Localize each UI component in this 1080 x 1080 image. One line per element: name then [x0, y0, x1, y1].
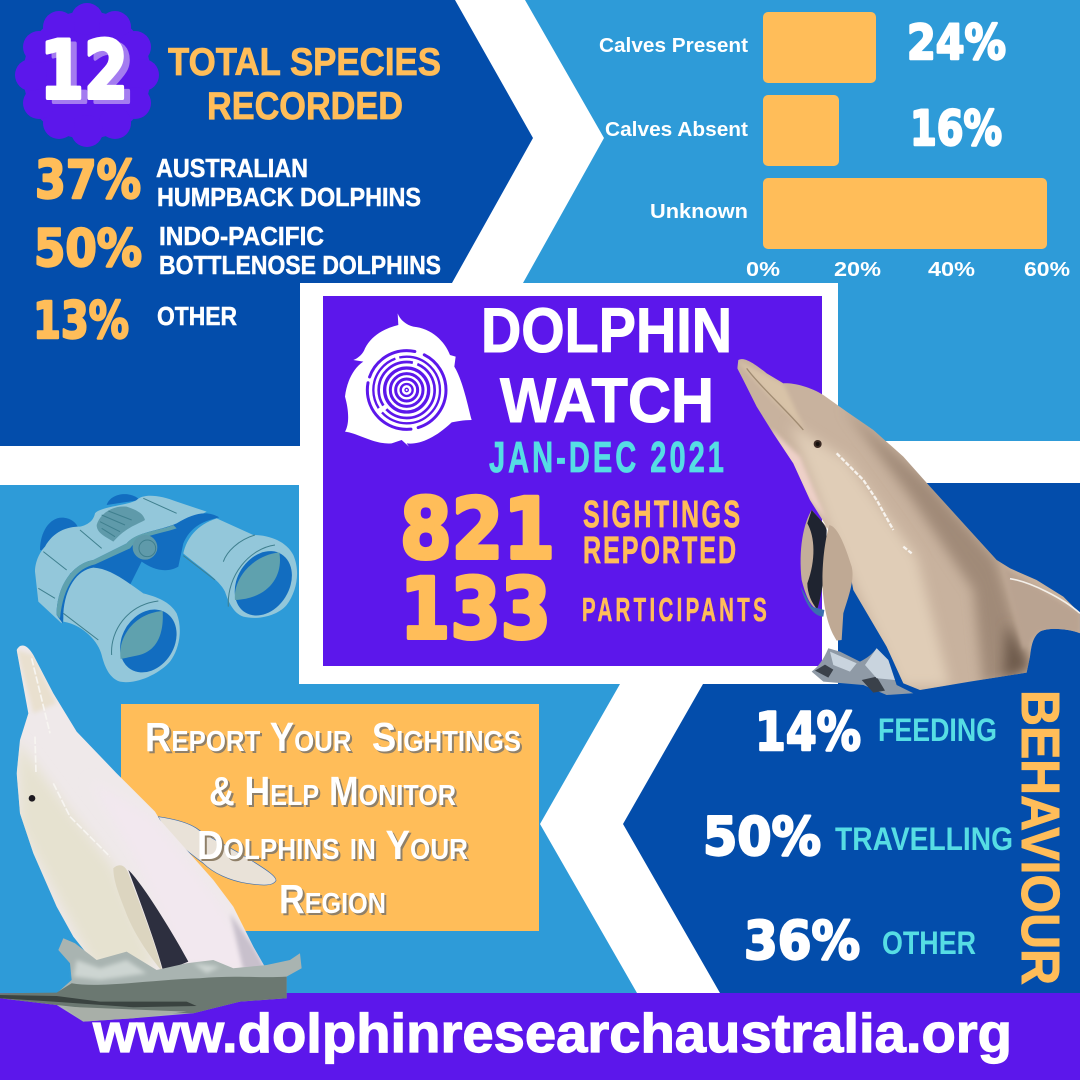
- text: report your sightings: & Help Monitor: [209, 768, 456, 814]
- heading: behaviour: BEHAVIOUR: [1010, 690, 1070, 985]
- stat: 13 percent other: OTHER: [157, 301, 237, 331]
- bar chart: calves: 16%: [910, 101, 1002, 157]
- text: report your sightings: Report Your Sightings: [145, 714, 521, 760]
- bar chart: calves: 24%: [907, 15, 1006, 71]
- stat: sightings reported: REPORTED: [583, 529, 736, 571]
- species breakdown: [33, 150, 441, 351]
- stat: other behaviour: 36%: [744, 911, 860, 972]
- badge: 12 total species: [15, 3, 159, 147]
- bar chart: calves: Unknown: [650, 201, 748, 223]
- panel: report sightings box: [121, 704, 539, 931]
- stat: 50 percent bottlenose: INDO-PACIFIC: [159, 221, 324, 251]
- bar chart: calves: 40%: [928, 259, 975, 281]
- stat: 37 percent humpback: 37%: [35, 150, 141, 211]
- stat: travelling: 50%: [703, 807, 821, 868]
- title: dolphin watch: [481, 296, 732, 436]
- stat: 37 percent humpback: AUSTRALIAN: [156, 153, 308, 183]
- bar chart: calves: Calves Absent: [605, 119, 748, 141]
- stat: other behaviour: [744, 911, 976, 972]
- behaviour stats: [703, 702, 1013, 972]
- icon: dolphin research logo: [345, 313, 472, 447]
- title: dolphin watch: WATCH: [500, 366, 714, 436]
- stat: feeding: FEEDING: [878, 712, 997, 748]
- stat: 50 percent bottlenose: BOTTLENOSE DOLPHINS: [159, 250, 441, 280]
- stat: travelling: TRAVELLING: [835, 821, 1013, 857]
- title: dolphin watch: DOLPHIN: [481, 296, 732, 366]
- badge: 12 total species: 12: [46, 28, 134, 121]
- heading: total species recorded: TOTAL SPECIES: [168, 41, 441, 84]
- bar chart: calves: Calves Present: [599, 35, 748, 57]
- stat: sightings reported: SIGHTINGS: [583, 493, 740, 535]
- stat: 37 percent humpback: HUMPBACK DOLPHINS: [157, 182, 421, 212]
- stat: participants: PARTICIPANTS: [582, 591, 767, 628]
- footer bar: [0, 993, 1080, 1080]
- stat: 50 percent bottlenose: [34, 220, 441, 280]
- date range: JAN-DEC 2021: [489, 432, 724, 481]
- bar chart: calves: 60%: [1024, 259, 1070, 281]
- text: report your sightings: Dolphins in Your: [197, 822, 468, 868]
- footer url: www.dolphinresearchaustralia.org: [92, 1002, 1012, 1064]
- heading: total species recorded: RECORDED: [207, 85, 403, 128]
- stat: other behaviour: OTHER: [882, 925, 976, 961]
- bar chart: calves: 20%: [834, 259, 881, 281]
- panel: central title block: [300, 283, 838, 684]
- stat: 37 percent humpback: [35, 150, 421, 212]
- stat: sightings reported: [400, 480, 740, 578]
- stat: 50 percent bottlenose: 50%: [34, 220, 142, 279]
- photo: humpback dolphin: [0, 640, 302, 1022]
- bar chart: calves: [599, 12, 1070, 281]
- stat: sightings reported: 821: [400, 480, 555, 578]
- stat: participants: 133: [400, 560, 551, 658]
- photo: bottlenose dolphin: [730, 350, 1080, 700]
- stat: travelling: [703, 807, 1013, 868]
- badge: 12 total species: 12: [40, 24, 128, 117]
- stat: participants: [400, 560, 767, 658]
- stat: feeding: 14%: [755, 702, 861, 763]
- bar chart: calves: 0%: [746, 259, 780, 281]
- stat: 13 percent other: 13%: [33, 292, 129, 351]
- stat: feeding: [755, 702, 997, 763]
- heading: total species recorded: [168, 41, 441, 128]
- text: report your sightings: [145, 714, 521, 922]
- stat: 13 percent other: [33, 292, 237, 351]
- icon: binoculars: [35, 494, 304, 683]
- text: report your sightings: Region: [279, 876, 386, 922]
